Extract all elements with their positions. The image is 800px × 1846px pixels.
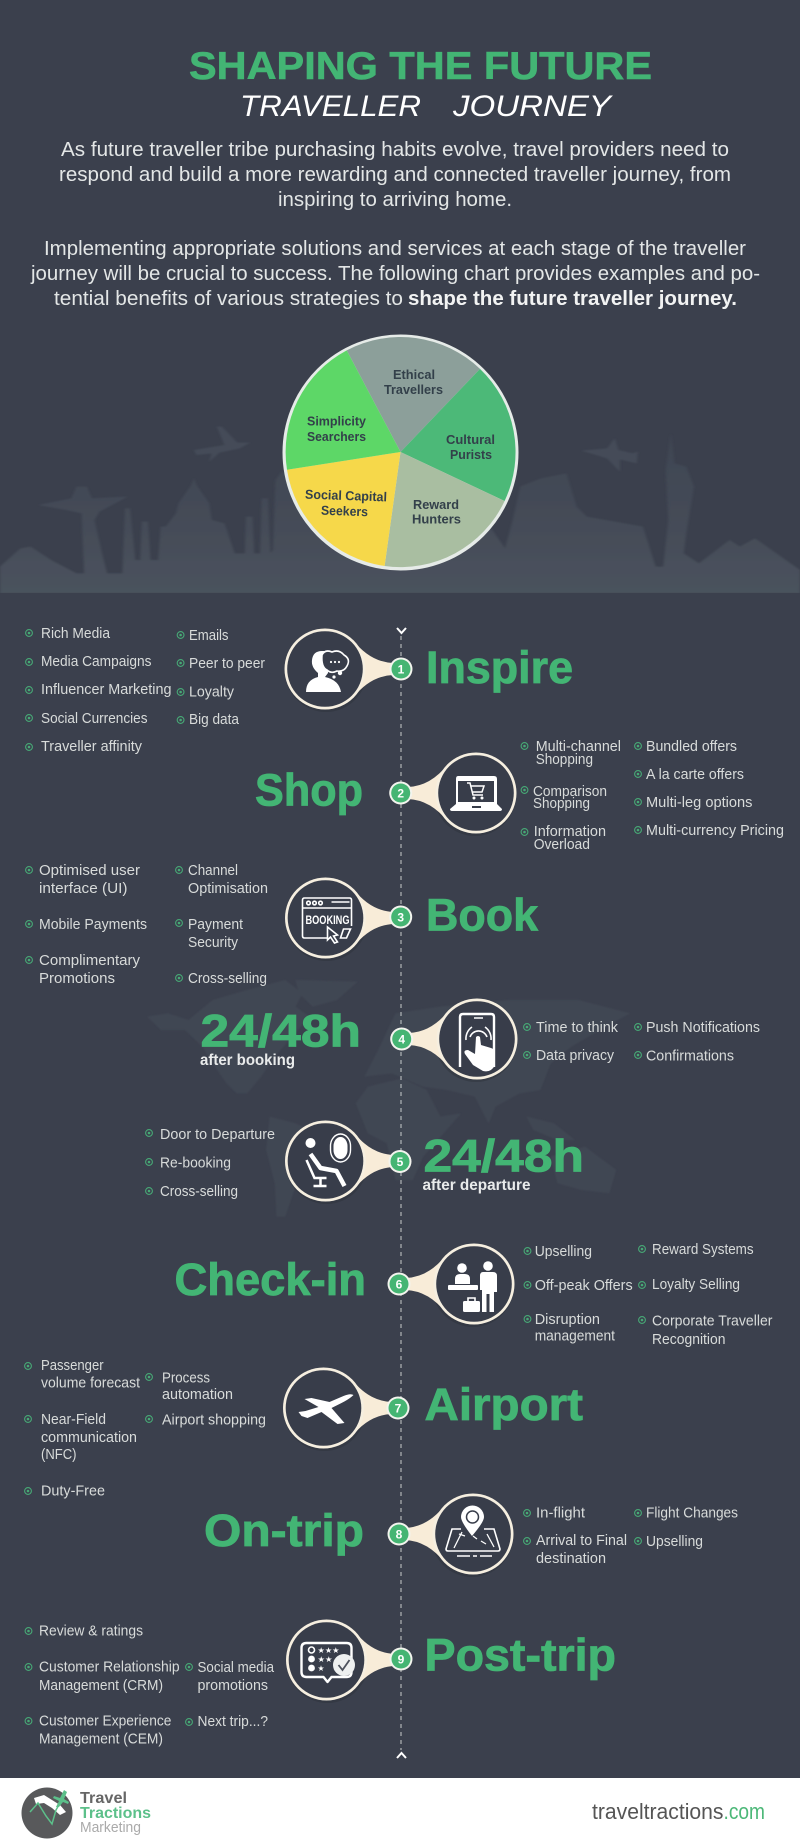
badge: 1: [390, 658, 412, 680]
badge: 7: [386, 1396, 410, 1420]
connector: step 9: [286, 1620, 394, 1703]
list: check-in column 2: Loyalty Selling: [652, 1277, 740, 1293]
list: post-trip column 2: Next trip...?: [198, 1714, 268, 1730]
list: inspire column 2: [177, 628, 265, 728]
title: [189, 45, 652, 123]
badge: 2: 2: [397, 786, 404, 800]
step 4: 24/48h after booking: [200, 998, 760, 1082]
heading: Book: Book: [426, 890, 539, 940]
list: after departure: Cross-selling: [160, 1184, 238, 1200]
step 5: 24/48h after departure: [146, 1120, 584, 1204]
list: inspire column 1: Social Currencies: [41, 711, 148, 727]
slice: Simplicity Searchers: Simplicity: [307, 414, 367, 428]
list: post-trip column 1: Customer Relationship: [39, 1660, 180, 1676]
intro paragraph 2: Implementing appropriate solutions and services at each stage of the traveller: [44, 238, 746, 260]
intro paragraph 1: As future traveller tribe purchasing habits evolve, travel providers need to: [61, 139, 729, 161]
band below skyline: [0, 593, 800, 605]
list: post-trip column 1: Review & ratings: [39, 1624, 143, 1640]
icon: ratings card: ★★: [318, 1655, 333, 1664]
list: book column 1: Optimised user: [39, 863, 140, 879]
arrow: timeline end: [397, 1753, 406, 1758]
badge: 4: [390, 1028, 413, 1050]
list: check-in column 1: Disruption: [535, 1312, 600, 1328]
list: book column 2: Cross-selling: [188, 971, 267, 987]
slice: Ethical Travellers: Ethical: [393, 367, 435, 382]
footer: [0, 1778, 800, 1846]
list: after booking column 1: Time to think: [536, 1020, 619, 1036]
title line 2: [240, 90, 613, 123]
title line 2: TRAVELLER: [240, 90, 421, 123]
list: check-in column 2: [639, 1242, 773, 1348]
list: check-in column 2: Reward Systems: [652, 1242, 754, 1258]
list: inspire column 1: Rich Media: [41, 626, 111, 642]
intro paragraph 2: journey will be crucial to success. The following chart provides examples and po-: [30, 263, 760, 285]
intro paragraph 1: inspiring to arriving home.: [278, 189, 512, 211]
list: book column 2: Payment: [188, 917, 243, 933]
slice: Reward Hunters: Hunters: [412, 512, 461, 526]
logo: globe with plane: [22, 1788, 72, 1838]
badge: 9: [390, 1648, 412, 1670]
list: book column 1: Promotions: [39, 971, 115, 987]
badge: 5: [388, 1150, 412, 1173]
list: shop column 2: A la carte offers: [646, 767, 744, 783]
connector: step 7: [283, 1368, 392, 1451]
badge: 4: 4: [398, 1032, 405, 1046]
icon: map pin: [446, 1506, 500, 1556]
icon: airplane: [298, 1394, 354, 1424]
icon: laptop with cart: [450, 776, 502, 811]
title line 1: SHAPING THE FUTURE: [189, 45, 652, 88]
list: shop column 1: Multi-channel: [536, 739, 621, 755]
list: book column 1: Mobile Payments: [39, 917, 147, 933]
list: shop column 1: Shopping: [533, 796, 590, 812]
heading: Inspire: Inspire: [426, 642, 573, 693]
list: inspire column 1: Traveller affinity: [41, 739, 143, 755]
connector: step 6: [406, 1244, 514, 1327]
heading: On-trip: On-trip: [204, 1505, 364, 1556]
list: inspire column 1: Influencer Marketing: [41, 682, 172, 698]
icon: booking window: [302, 898, 352, 943]
subheading: after departure: after departure: [422, 1177, 531, 1194]
list: shop column 1: [521, 739, 621, 853]
list: check-in column 1: Off-peak Offers: [535, 1278, 633, 1294]
logo text: Tractions: [80, 1805, 151, 1822]
logo text: Marketing: [80, 1819, 141, 1836]
icon: check-in desk: [448, 1261, 497, 1312]
subheading: after booking: after booking: [200, 1052, 295, 1069]
intro paragraph 2: [30, 238, 760, 310]
connector: step 1: [284, 628, 393, 712]
list: inspire column 1: [26, 626, 171, 755]
list: shop column 1: Shopping: [536, 752, 593, 768]
list: airport column 2: [146, 1370, 266, 1428]
intro paragraph 2: shape the future traveller journey.: [408, 288, 737, 310]
step 1: Inspire: [26, 626, 573, 755]
badge: 6: 6: [396, 1278, 403, 1292]
list: after departure: Door to Departure: [160, 1127, 275, 1143]
heading: Shop: Shop: [255, 764, 363, 816]
list: shop column 2: Multi-currency Pricing: [646, 823, 784, 839]
list: on-trip column 1: Arrival to Final: [536, 1533, 627, 1549]
list: book column 2: [176, 863, 268, 987]
slice: Reward Hunters: Reward: [413, 497, 459, 512]
heading: 24/48h: 24/48h: [424, 1130, 584, 1182]
list: shop column 1: Information: [534, 824, 606, 840]
list: airport column 1: [25, 1358, 140, 1500]
list: check-in column 1: management: [535, 1328, 615, 1344]
arrow: timeline start: [397, 628, 406, 633]
list: post-trip column 1: [25, 1624, 180, 1748]
list: shop column 1: Overload: [534, 837, 590, 853]
badge: 7: 7: [395, 1402, 402, 1416]
title line 2: JOURNEY: [452, 90, 613, 123]
step 7: Airport: [25, 1358, 583, 1500]
slice: Cultural Purists: Cultural: [446, 432, 495, 447]
list: on-trip column 1: In-flight: [536, 1506, 585, 1522]
icon: booking window: BOOKING: [306, 915, 350, 927]
world map backdrop: [147, 980, 630, 1217]
list: airport column 1: volume forecast: [41, 1376, 140, 1392]
badge: 8: [388, 1522, 410, 1546]
slice: Social Capital Seekers: [287, 452, 400, 566]
list: shop column 2: Bundled offers: [646, 739, 737, 755]
pie chart: traveller tribes: [284, 336, 517, 569]
badge: 1: 1: [398, 662, 405, 676]
list: after departure: Re-booking: [160, 1156, 231, 1172]
badge: 3: 3: [397, 910, 404, 924]
list: post-trip column 1: Customer Experience: [39, 1714, 171, 1730]
list: book column 2: Security: [188, 935, 239, 951]
icon: ratings card: ★: [318, 1664, 324, 1673]
step 6: Check-in: [174, 1242, 773, 1348]
list: inspire column 1: Media Campaigns: [41, 654, 152, 670]
connector: step 4: [409, 998, 518, 1082]
list: after booking column 1: Data privacy: [536, 1048, 615, 1064]
list: airport column 2: Process: [162, 1370, 210, 1386]
list: post-trip column 2: promotions: [198, 1678, 268, 1694]
list: book column 1: Complimentary: [39, 953, 141, 969]
slice: Social Capital Seekers: Seekers: [321, 503, 368, 519]
logo text: Travel: [80, 1790, 127, 1807]
badge: 8: 8: [396, 1528, 403, 1542]
icon: ratings card: [302, 1643, 355, 1682]
slice: Cultural Purists: Purists: [450, 447, 492, 462]
slice: Cultural Purists: [400, 369, 516, 501]
heading: Airport: Airport: [424, 1379, 583, 1430]
badge: 5: 5: [397, 1155, 404, 1169]
list: after booking column 2: Confirmations: [646, 1048, 734, 1064]
icon: seated passenger: [306, 1134, 350, 1186]
list: post-trip column 1: Management (CEM): [39, 1732, 163, 1748]
slice: Simplicity Searchers: Searchers: [307, 429, 366, 444]
heading: Post-trip: Post-trip: [424, 1630, 616, 1680]
timeline dashed line: [400, 636, 402, 1750]
list: on-trip column 1: destination: [536, 1551, 606, 1567]
list: post-trip column 1: Management (CRM): [39, 1678, 163, 1694]
list: airport column 1: Passenger: [41, 1358, 104, 1374]
list: on-trip column 1: [524, 1506, 627, 1567]
list: shop column 2: Multi-leg options: [646, 795, 752, 811]
heading: Check-in: Check-in: [174, 1254, 366, 1305]
list: inspire column 2: Big data: [189, 712, 240, 728]
badge: 6: [388, 1272, 410, 1296]
step 8: On-trip: [204, 1494, 738, 1577]
step 9: Post-trip: [25, 1620, 616, 1748]
icon: ratings card: ★★★: [318, 1646, 340, 1655]
website: traveltractions: [592, 1799, 724, 1824]
list: on-trip column 2: Upselling: [646, 1534, 703, 1550]
list: book column 1: [26, 863, 147, 987]
heading: 24/48h: 24/48h: [200, 1006, 361, 1056]
list: after booking column 1: [524, 1020, 619, 1064]
slice: Simplicity Searchers: [286, 350, 400, 470]
website: .com: [724, 1799, 765, 1824]
list: on-trip column 2: [635, 1506, 738, 1550]
list: airport column 2: Airport shopping: [162, 1412, 266, 1428]
list: after departure: [146, 1127, 275, 1200]
list: inspire column 2: Emails: [189, 628, 228, 644]
slice: Social Capital Seekers: Social Capital: [305, 487, 387, 504]
list: after booking column 2: [635, 1020, 760, 1064]
list: book column 2: Optimisation: [188, 881, 268, 897]
list: check-in column 2: Corporate Traveller: [652, 1314, 773, 1330]
list: check-in column 1: Upselling: [535, 1244, 592, 1260]
badge: 9: 9: [398, 1652, 405, 1666]
list: on-trip column 2: Flight Changes: [646, 1506, 738, 1522]
header skyline silhouette: [0, 427, 800, 593]
list: after booking column 2: Push Notifications: [646, 1020, 760, 1036]
list: book column 2: Channel: [188, 863, 238, 879]
connector: step 3: [285, 878, 394, 961]
list: airport column 1: (NFC): [41, 1447, 76, 1463]
step 3: Book: [26, 863, 539, 987]
badge: 3: [389, 906, 412, 928]
slice: Ethical Travellers: Travellers: [384, 382, 443, 397]
connector: step 5: [285, 1120, 394, 1204]
logo text: [80, 1790, 151, 1836]
list: post-trip column 2: Social media: [198, 1660, 275, 1676]
list: check-in column 1: [524, 1244, 633, 1344]
list: airport column 1: communication: [41, 1430, 137, 1446]
list: inspire column 2: Peer to peer: [189, 656, 265, 672]
intro paragraph 1: respond and build a more rewarding and connected traveller journey, from: [59, 164, 731, 186]
intro paragraph 2: tential benefits of various strategies to: [54, 288, 403, 310]
intro paragraph 1: [59, 139, 731, 211]
badge: 2: [389, 782, 412, 804]
step 2: Shop: [255, 739, 784, 853]
list: airport column 1: Near-Field: [41, 1412, 106, 1428]
list: book column 1: interface (UI): [39, 881, 128, 897]
icon: tapping phone: [460, 1014, 495, 1071]
list: airport column 1: Duty-Free: [41, 1484, 105, 1500]
list: shop column 1: Comparison: [533, 784, 607, 800]
list: check-in column 2: Recognition: [652, 1332, 726, 1348]
slice: Reward Hunters: [385, 452, 505, 567]
connector: step 8: [405, 1494, 514, 1577]
list: airport column 2: automation: [162, 1387, 233, 1403]
connector: step 2: [408, 752, 516, 836]
list: inspire column 2: Loyalty: [189, 684, 235, 700]
list: post-trip column 2: [186, 1660, 275, 1730]
icon: person thinking: [306, 651, 348, 692]
slice: Ethical Travellers: [347, 337, 480, 452]
list: shop column 2: [635, 739, 784, 839]
